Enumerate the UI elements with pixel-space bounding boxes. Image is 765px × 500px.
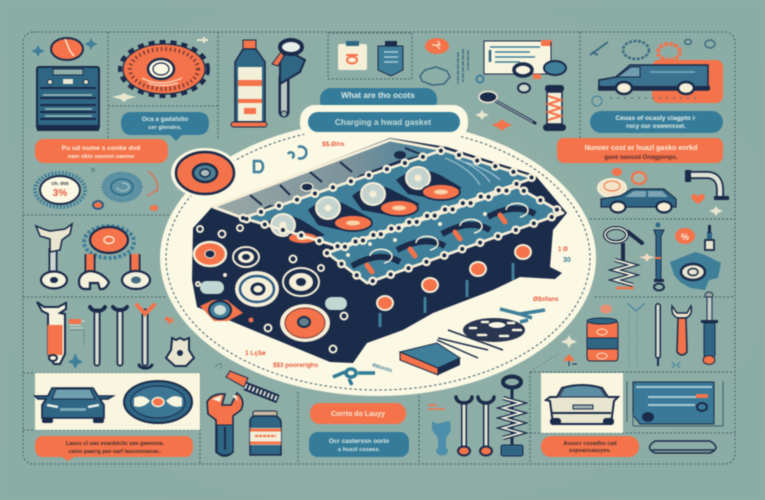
- icon: car front: [35, 388, 113, 423]
- icon: percent gauge: [35, 173, 85, 207]
- icon: blue splat: [333, 369, 375, 385]
- title pill: top: [320, 88, 437, 112]
- medallion small items: [245, 141, 571, 385]
- icon: small rings and spanner: [476, 76, 535, 123]
- dashed box clipboards: [338, 41, 403, 76]
- callout: blue speech bubble: Oca a gadalstio: [142, 116, 188, 123]
- callout: orange left: [35, 139, 168, 163]
- icon: delivery van: [592, 60, 723, 106]
- callout: orange centre: [310, 403, 406, 424]
- callout: blue right: [590, 111, 723, 133]
- icons: star and arrow: [561, 335, 577, 366]
- callout: blue centre: s huszl cssass.: [338, 447, 380, 453]
- callout: orange bottom left: [35, 436, 193, 461]
- callout: orange left: Pu ud oume s cooke dvd: [62, 145, 140, 152]
- callout: orange left: eaor okto oaxnon oaomo: [68, 154, 135, 160]
- icon: orange badge: [675, 228, 695, 244]
- callout: blue right: rocy our oswensset.: [626, 123, 686, 130]
- icon: handle: [650, 441, 716, 453]
- icon: measuring ruler: [627, 303, 645, 366]
- icon: car with circles: [598, 168, 676, 212]
- callout: blue centre: Ocr casterssn oorlo: [329, 438, 389, 445]
- icon: steering wheel: [124, 381, 192, 423]
- icon: small spanner: [68, 316, 194, 369]
- icon: long screwdriver: [654, 222, 664, 290]
- icon: orange badge: %: [681, 232, 689, 242]
- icon: slim wrenches: [90, 305, 154, 368]
- icon: percent gauge: 3%: [53, 188, 67, 199]
- icon: slim screwdriver: [655, 306, 661, 366]
- title pill: top: What are tho ocots: [341, 91, 415, 100]
- red cost labels: Ø$sfans: [533, 296, 559, 303]
- lines and spanner: [437, 330, 503, 358]
- icon: adjustable wrench: [207, 393, 243, 456]
- callout: orange bottom right: oxpvansaasyes.: [569, 448, 612, 454]
- icon: wrench with ring: [36, 224, 72, 288]
- icon: clipboard cream: [338, 41, 367, 70]
- icon: small clamps: [254, 146, 306, 172]
- icon: orange wrench: [672, 306, 691, 368]
- title pill: subtitle: Charging a hwad gasket: [335, 117, 431, 127]
- icon: heart and star: [691, 194, 723, 216]
- callout: orange centre: Corrto do Lauyy: [331, 411, 385, 418]
- icon: orange gear: [120, 42, 208, 96]
- callout: blue centre: [309, 432, 409, 457]
- engine back panel: [213, 140, 443, 218]
- icon: small gasket: [463, 318, 525, 342]
- icon: sparkles right: [475, 110, 512, 131]
- callout: blue right: Ceuas of ocasly ciagpto i·: [615, 115, 697, 122]
- callout: blue speech bubble: [121, 112, 209, 141]
- red cost labels: $$3 poorerighs: [273, 362, 319, 369]
- icon: sparkles: [31, 37, 208, 102]
- large orange pulley: [171, 148, 239, 198]
- panel: front car: [541, 373, 623, 433]
- red cost labels: 1 Lç5ø: [245, 350, 266, 357]
- icon: spring barrel: [543, 85, 566, 131]
- callout: orange right: [557, 138, 723, 163]
- callout: orange bottom right: [541, 436, 639, 457]
- panel: car and wheel: [35, 373, 200, 430]
- cylinders: [271, 167, 430, 236]
- icon: jar: [250, 411, 281, 455]
- icon: swirl gear: [92, 168, 158, 211]
- engine lower plate with curls: [327, 187, 563, 283]
- icon: box: [400, 343, 460, 375]
- callout: orange bottom left: Laaxs cl oas exanblclic sav gweoma.: [66, 441, 165, 447]
- title pill: subtitle: [300, 105, 468, 139]
- engine top plate with cylinders: [243, 150, 533, 247]
- callout: orange bottom left: caisn paarrg pav oarf lasosmnasse..: [69, 449, 162, 455]
- engine block: [192, 138, 567, 363]
- orange swirls: [288, 184, 460, 244]
- icon: measure lines: [458, 49, 468, 84]
- icon: hex nut: [420, 67, 450, 85]
- icon: clipboard blue: [378, 41, 403, 76]
- icon: tool chest: [37, 67, 99, 131]
- icon: bottom wrenches and spring: [428, 376, 523, 456]
- icon: document with gauges: [484, 40, 566, 79]
- red cost labels: $$.Ø/ro: [322, 141, 344, 148]
- icon: hook with spring: [605, 228, 642, 288]
- gasket outlines: [213, 140, 563, 283]
- icon: blue machine: [627, 381, 723, 426]
- small blue label: ØB5A55S: [372, 362, 393, 373]
- callout: orange bottom right: Avsocr cssadbo cad: [563, 441, 617, 447]
- icon: large orange wrench: [37, 302, 66, 364]
- icon: percent gauge: Oh. Ø0$: [51, 181, 69, 186]
- icon: blue gear: [670, 252, 721, 290]
- icon: blue screwdriver: [701, 292, 718, 364]
- icon: pipe elbow: [688, 170, 729, 198]
- icon: socket wrench: [272, 40, 305, 117]
- icon: blue chain link: [500, 309, 545, 322]
- red cost labels: [245, 141, 571, 369]
- star: [639, 253, 655, 262]
- central cream medallion: [160, 120, 596, 396]
- icon: top right gears: [590, 40, 715, 60]
- icon: orange dial: [425, 38, 449, 54]
- side rings: [194, 242, 347, 342]
- icon: orange bolt: [215, 363, 278, 399]
- icon: sealant bottle: [231, 40, 267, 127]
- callout: blue speech bubble: cer glendes.: [148, 125, 182, 131]
- icon: gear with two wrenches: [79, 226, 150, 289]
- callout: orange right: gavo oaossd Onagponps.: [604, 155, 678, 161]
- engine body: [192, 138, 567, 363]
- icon: orange can: [587, 304, 618, 361]
- red cost labels: 1 Ø: [558, 247, 568, 253]
- icon: clock: [51, 38, 83, 60]
- callout: orange right: Nunner cost or huazl gasko enrkd: [585, 145, 697, 152]
- icon: small socket: [705, 225, 714, 250]
- small bolt holes: [196, 225, 348, 352]
- side bolts: [377, 245, 531, 327]
- red cost labels: 30: [563, 257, 571, 264]
